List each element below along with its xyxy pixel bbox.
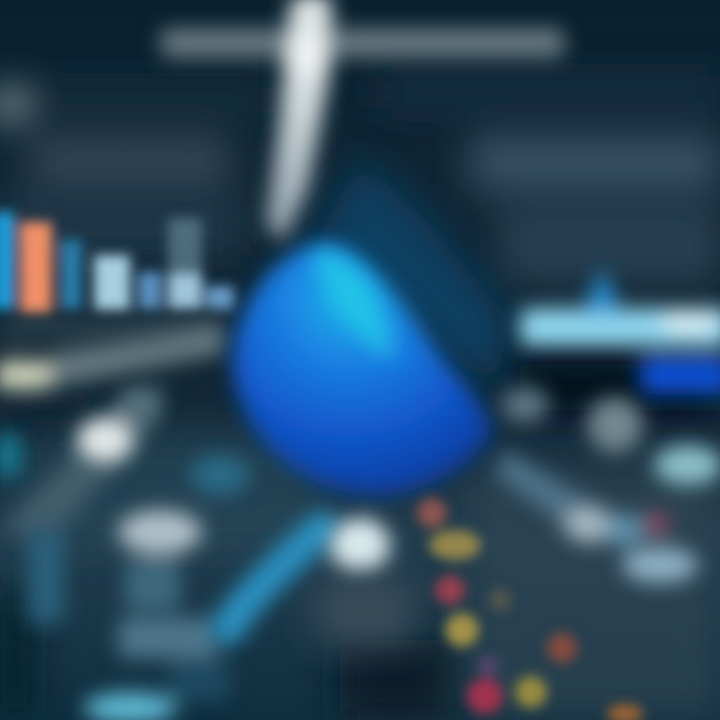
panel: right bright band	[520, 268, 720, 394]
coloured dots	[417, 498, 643, 720]
panel: left grey streaks	[0, 316, 225, 540]
panel: centre lower grey block	[315, 580, 415, 645]
panel: lower left tiles	[0, 389, 250, 720]
panel: left coloured bars	[0, 212, 234, 314]
white vertical beam	[266, 0, 332, 242]
blue drop	[232, 243, 492, 496]
cyan curved streak	[228, 528, 322, 628]
shadow cone above the drop	[310, 160, 510, 390]
white glow spot	[330, 518, 390, 574]
panel: right lower blurred tiles	[495, 387, 720, 583]
heading band	[160, 28, 565, 58]
drop highlight	[315, 250, 395, 360]
